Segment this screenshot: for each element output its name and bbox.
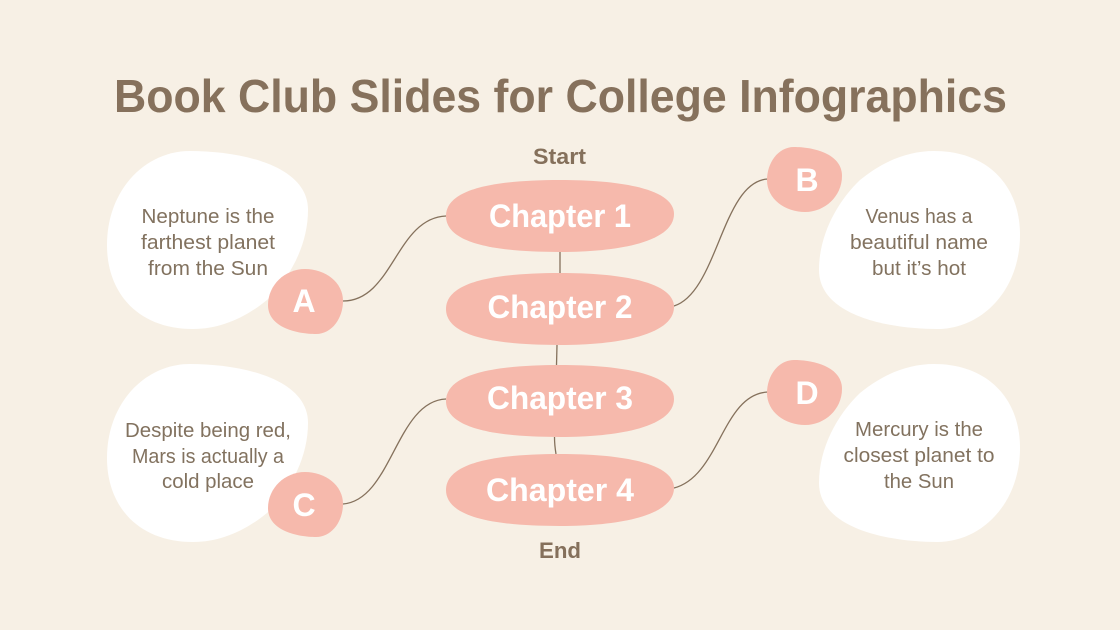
icon: badge B: B: [795, 162, 819, 198]
panel: Venus note: Venus has a: [866, 205, 973, 228]
panel: Neptune note: [107, 151, 308, 329]
panel: Neptune note: from the Sun: [148, 257, 268, 280]
panel: Mars note: Mars is actually a: [132, 445, 285, 468]
chapter 2 pill: [446, 273, 674, 345]
panel: Neptune note: Neptune is the: [142, 205, 274, 228]
chapter 1 pill: Chapter 1: [489, 198, 631, 234]
panel: Mercury note: closest planet to: [844, 444, 994, 467]
icon: badge B: [767, 147, 842, 212]
title: Book Club Slides for College Infographics: [114, 70, 1007, 122]
panel: Mars note: Despite being red,: [125, 419, 291, 442]
panel: Mars note: cold place: [162, 470, 254, 493]
panel: Venus note: beautiful name: [850, 231, 988, 254]
connector Chapter 4 to D: [674, 392, 768, 488]
panel: Mercury note: the Sun: [884, 470, 954, 493]
panel: Neptune note: farthest planet: [141, 231, 275, 254]
panel: Mars note: [107, 364, 308, 542]
icon: badge A: [268, 269, 343, 334]
icon: badge C: [268, 472, 343, 537]
panel: Mercury note: Mercury is the: [855, 418, 983, 441]
panel: Mercury note: [819, 364, 1020, 542]
start label: Start: [533, 144, 587, 169]
icon: badge D: [767, 360, 842, 425]
chapter 2 pill: Chapter 2: [488, 289, 632, 325]
chapter 4 pill: [446, 454, 674, 526]
chapter 3 pill: Chapter 3: [487, 380, 633, 416]
chapter 4 pill: Chapter 4: [486, 472, 634, 508]
central chain connectors: [554, 252, 560, 454]
icon: badge A: A: [292, 283, 316, 319]
icon: badge D: D: [795, 375, 819, 411]
icon: badge C: C: [292, 487, 316, 523]
end label: End: [539, 538, 581, 563]
connector Chapter 2 to B: [674, 179, 768, 306]
panel: Venus note: [819, 151, 1020, 329]
connector C to Chapter 3: [343, 399, 446, 504]
chapter 1 pill: [446, 180, 674, 252]
chapter 3 pill: [446, 365, 674, 437]
panel: Venus note: but it’s hot: [872, 257, 966, 280]
connector A to Chapter 1: [343, 216, 446, 301]
